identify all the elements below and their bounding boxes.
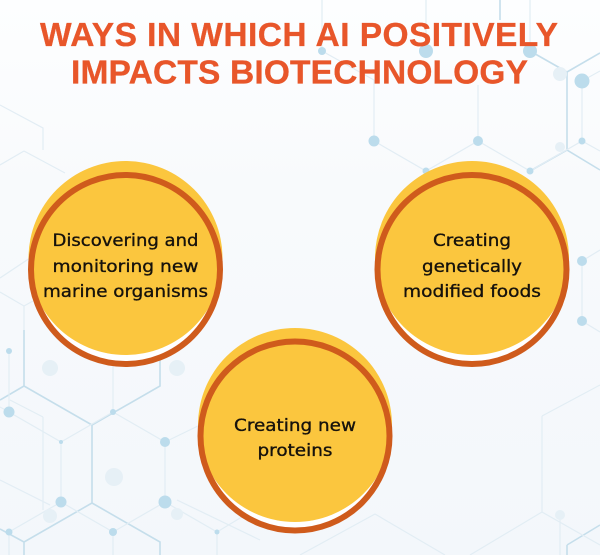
title (40, 17, 558, 92)
panel: discovering and monitoring new marine organisms (28, 161, 222, 364)
text: modified foods label: modified foods (403, 282, 541, 302)
panel: creating genetically modified foods (375, 161, 569, 364)
title: WAYS IN WHICH AI POSITIVELY (40, 17, 558, 54)
text: modified foods label (403, 231, 541, 302)
text: new proteins label (234, 416, 356, 461)
text: modified foods label: genetically (422, 257, 522, 277)
panel: creating new proteins (198, 328, 392, 530)
title: IMPACTS BIOTECHNOLOGY (71, 54, 528, 92)
text: new proteins label: Creating new (234, 416, 356, 436)
text: new proteins label: proteins (258, 441, 333, 461)
text: marine organisms label: marine organisms (43, 282, 208, 302)
text: modified foods label: Creating (433, 231, 511, 251)
text: marine organisms label: monitoring new (52, 257, 199, 277)
text: marine organisms label: Discovering and (52, 231, 198, 251)
text: marine organisms label (43, 231, 208, 302)
